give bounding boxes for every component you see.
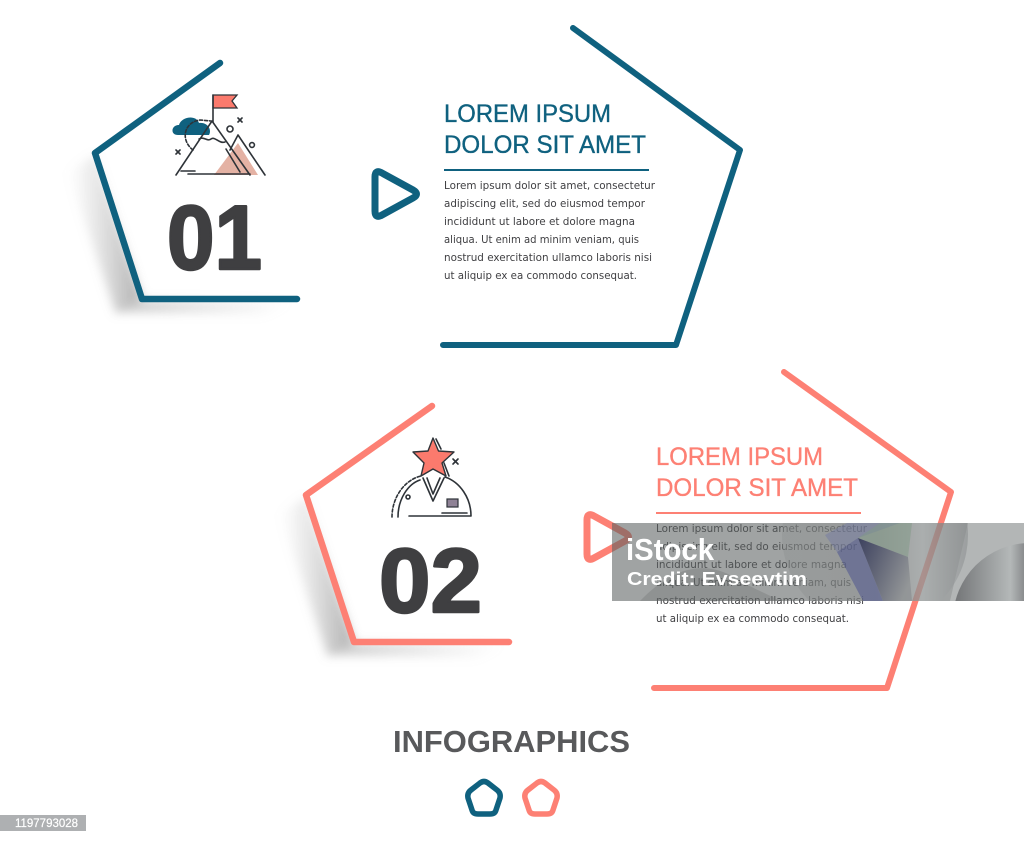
watermark band [612,523,1024,601]
arrow: step 01 [375,172,416,216]
body text: step 02: ut aliquip ex ea commodo consequat. [656,612,849,625]
body text: step 01: incididunt ut labore et dolore magna [444,215,635,228]
divider: step 02 [656,512,861,514]
pentagon outline: step 01 [95,63,297,299]
body text: step 02: Lorem ipsum dolor sit amet, consectetur [656,522,867,535]
body text: step 02: nostrud exercitation ullamco laboris nisi [656,594,864,607]
panel: step 01 text [443,28,740,345]
title: infographics: INFOGRAPHICS [393,724,630,759]
icon: mountain with flag [172,95,265,175]
pentagon outline: step 02 text [654,372,951,688]
number 02: 02 [379,531,482,632]
icon: small blue pentagon [468,782,500,814]
body text: step 02: incididunt ut labore et dolore magna [656,558,847,571]
pentagon outline: step 01 text [443,28,740,345]
watermark: credit: Credit: Evseevtim [627,569,807,589]
shadow: step 02 [280,497,506,657]
shadow: step 01 [68,155,294,314]
divider: step 01 [444,169,649,171]
heading: step 01: DOLOR SIT AMET [444,131,646,159]
heading: step 01: LOREM IPSUM [444,100,611,128]
heading: step 02: DOLOR SIT AMET [656,474,858,502]
body text: step 01: adipiscing elit, sed do eiusmod tempor [444,197,645,210]
panel: step 02 text [654,372,951,688]
watermark: iStock: iStock [626,532,715,567]
stock id tag: 1197793028 [15,816,78,830]
panel: step 02 badge [280,406,509,657]
body text: step 01: Lorem ipsum dolor sit amet, consectetur [444,179,655,192]
body text: step 01: nostrud exercitation ullamco laboris nisi [444,251,652,264]
body text: step 01: ut aliquip ex ea commodo consequat. [444,269,637,282]
pentagon outline: step 02 [306,406,509,642]
body text: step 01: aliqua. Ut enim ad minim veniam, quis [444,233,639,246]
icon: star and uniform [392,438,471,517]
body text: step 02: adipiscing elit, sed do eiusmod tempor [656,540,857,553]
heading: step 02: LOREM IPSUM [656,443,823,471]
number 01: 01 [167,188,262,289]
panel: step 01 badge [68,63,297,314]
icon: small coral pentagon [525,782,557,814]
body text: step 02: aliqua. Ut enim ad minim veniam, quis [656,576,851,589]
stock id tag [0,815,86,831]
arrow: step 02 [587,515,628,559]
